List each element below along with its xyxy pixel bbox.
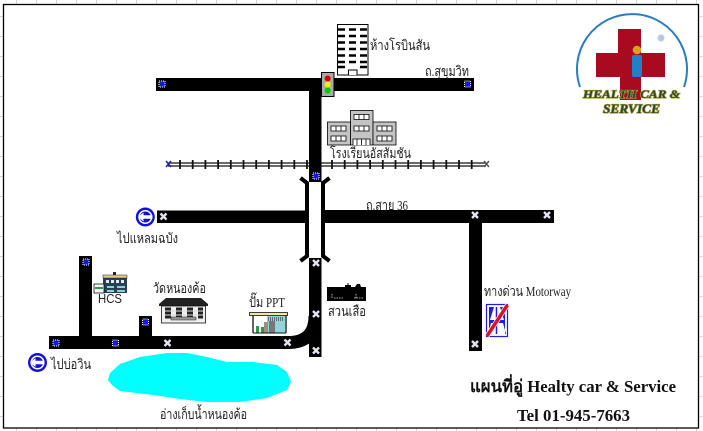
label: to Laem Chabang: ไปแหลมฉบัง [116, 230, 178, 247]
railway line [166, 160, 489, 169]
icon: Robinson department store tower [338, 24, 368, 75]
label: PPT gas station: ปั๊ม PPT [249, 292, 285, 311]
blue markers [53, 81, 470, 346]
label: to Ban Bueng: ไปบ่อวิน [50, 356, 91, 373]
label: Robinson: ห้างโรบินสัน [370, 37, 430, 54]
label: Assumption school: โรงเรียนอัสสัมชัน [330, 145, 411, 162]
road: short branch [139, 316, 152, 338]
icon: PPT gas station [250, 312, 288, 334]
icon: Wat Nong Kho temple [159, 298, 208, 323]
label: Tiger park: สวนเสือ [328, 304, 366, 320]
logo red cross [596, 29, 665, 100]
icon: end of motorway sign [486, 304, 508, 336]
label: Wat Nong Kho: วัดหนองค้อ [153, 281, 206, 297]
road junction markers [53, 81, 550, 354]
icon: west arrow to Ban Bueng [28, 353, 47, 372]
road: Highway 36 west [157, 210, 306, 223]
road: Sukhumvit [156, 78, 474, 91]
logo registered mark [658, 34, 664, 42]
white cross markers [160, 212, 550, 354]
road: vertical south section [309, 258, 322, 357]
icon: traffic light [322, 72, 334, 96]
road: vertical north section [309, 78, 322, 182]
label: Sukhumvit road: ถ.สุขุมวิท [425, 65, 469, 80]
logo: Health Car & Service [577, 14, 687, 116]
icon: west arrow to Laem Chabang [136, 208, 155, 226]
label: Nong Kho reservoir: อ่างเก็บน้ำหนองค้อ [160, 404, 247, 423]
icon: Assumption school building [328, 110, 396, 145]
logo text: HEALTH CAR & [582, 87, 681, 101]
railway bridge [300, 178, 330, 261]
icon: Tiger park [327, 283, 366, 301]
icon: HCS garage building [94, 272, 127, 293]
label: Highway 36: ถ.สาย 36 [366, 199, 408, 214]
logo arc [577, 14, 687, 87]
road network [49, 78, 554, 357]
label: HCS: HCS [98, 292, 122, 306]
title: map heading: แผนที่อู่ Healty car & Service [470, 374, 676, 398]
logo blue figure [632, 46, 642, 77]
title: telephone: Tel 01-945-7663 [517, 406, 630, 425]
road: Highway 36 east [324, 210, 554, 223]
road: Ban Bueng road with curve [49, 316, 315, 342]
logo text line 2: SERVICE [603, 101, 660, 116]
road: motorway branch [469, 210, 482, 351]
lake: Nong Kho reservoir [108, 353, 291, 402]
road: HCS branch [79, 256, 92, 338]
label: Motorway: ทางด่วน Motorway [484, 285, 571, 300]
